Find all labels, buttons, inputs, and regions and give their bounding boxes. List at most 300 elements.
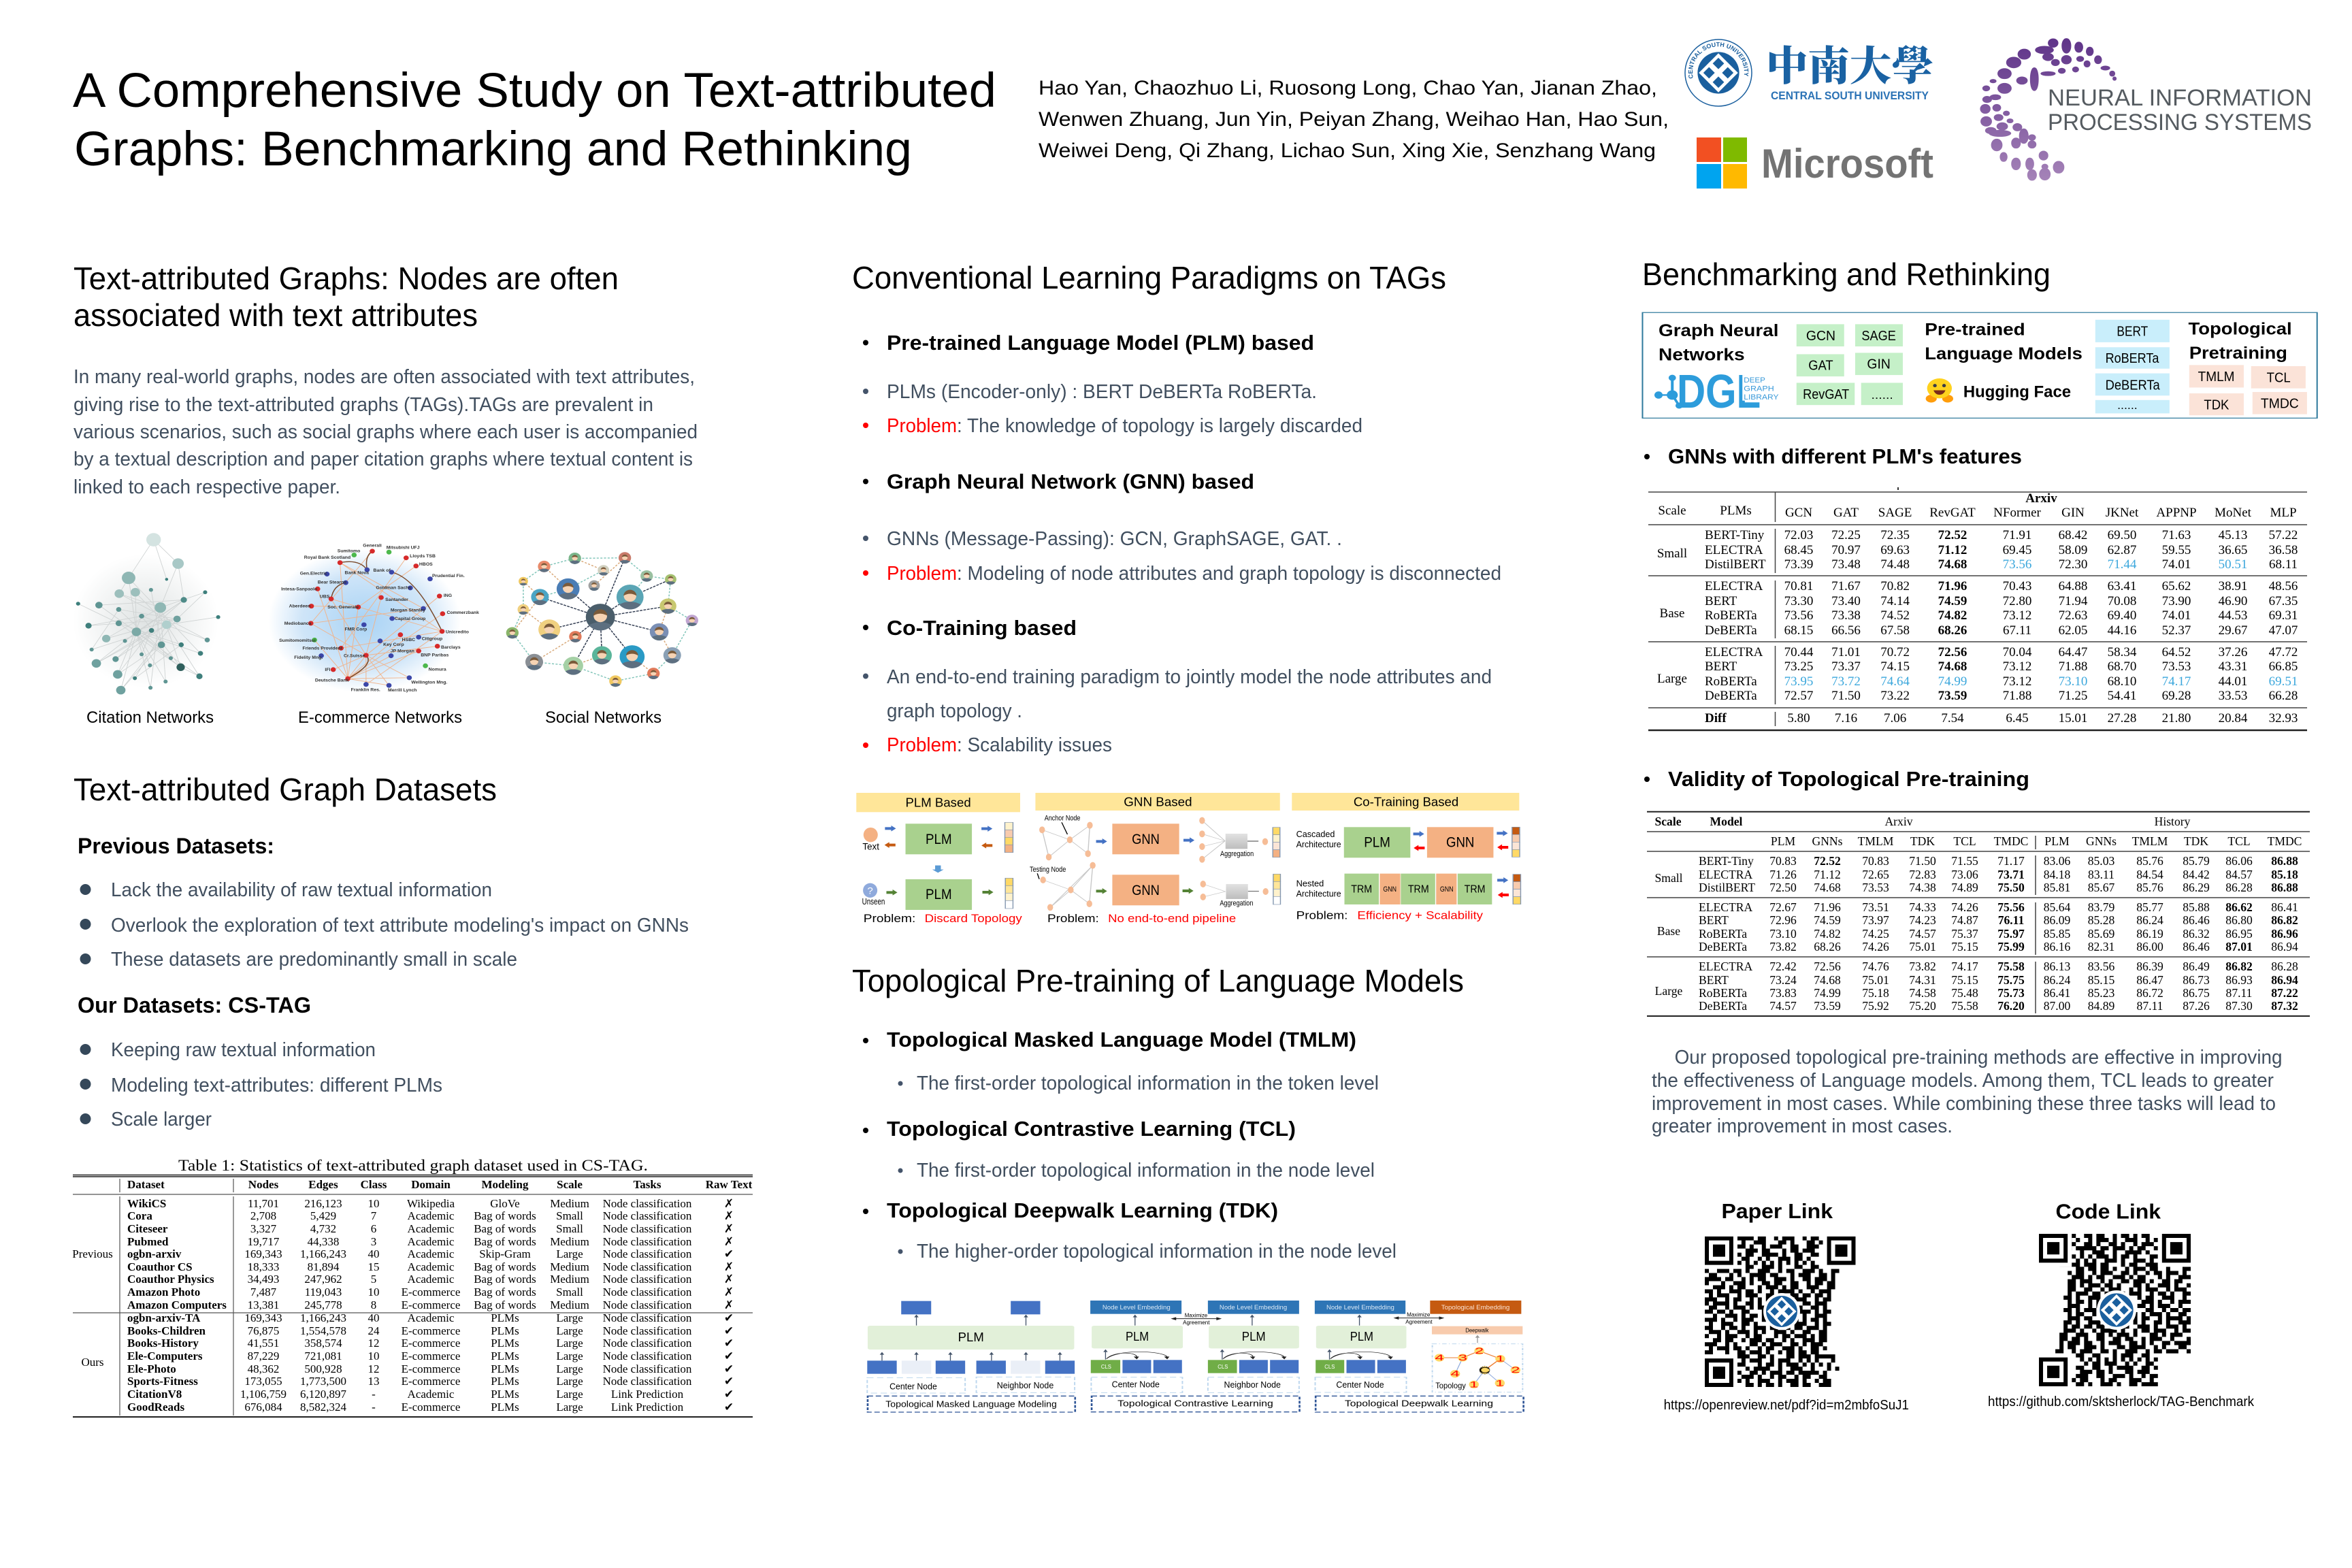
panel: co-training based: Efficiency + Scalability bbox=[1357, 909, 1483, 921]
list item: TCL: The first-order topological information in the node level bbox=[917, 1160, 1375, 1181]
table: dataset statistics: E-commerce bbox=[402, 1362, 460, 1375]
table: GNNs with different PLMs: 73.30 bbox=[1784, 594, 1813, 608]
table: topological pre-training results: 86.46 bbox=[2183, 940, 2210, 953]
table: dataset statistics: Large bbox=[556, 1247, 583, 1260]
table: GNNs with different PLMs: 36.65 bbox=[2219, 543, 2247, 557]
table: dataset statistics bbox=[72, 1157, 753, 1417]
panel: GNN based: Problem: bbox=[1047, 912, 1099, 925]
table: GNNs with different PLMs: 74.01 bbox=[2162, 608, 2191, 623]
table: dataset statistics: Class bbox=[361, 1178, 387, 1191]
panel: topological deepwalk learning: 3 bbox=[1458, 1353, 1467, 1362]
table: GNNs with different PLMs: BERT bbox=[1705, 659, 1737, 674]
table: dataset statistics: Bag of words bbox=[474, 1235, 536, 1248]
table: GNNs with different PLMs: 7.54 bbox=[1941, 711, 1964, 725]
table: GNNs with different PLMs: 32.93 bbox=[2269, 711, 2298, 725]
panel: GNN based: Aggregation bbox=[1220, 849, 1254, 858]
list: GNN based bbox=[863, 470, 1501, 585]
sub-panel: topological pretraining: TMDC bbox=[2261, 395, 2299, 411]
panel: GNN based: Anchor Node bbox=[1045, 814, 1080, 822]
panel: topological deepwalk learning: Deepwalk bbox=[1465, 1327, 1489, 1333]
table: topological pre-training results: 74.87 bbox=[1951, 913, 1978, 927]
table: dataset statistics: Sports-Fitness bbox=[127, 1375, 198, 1388]
table: GNNs with different PLMs: 44.16 bbox=[2108, 623, 2136, 638]
table: dataset statistics: ✔ bbox=[724, 1401, 734, 1414]
table: GNNs with different PLMs: 73.90 bbox=[2162, 594, 2191, 608]
table: topological pre-training results: 76.20 bbox=[1997, 999, 2025, 1013]
table: GNNs with different PLMs: 73.12 bbox=[2003, 674, 2031, 689]
table: dataset statistics: 7,487 bbox=[250, 1286, 277, 1298]
table: topological pre-training results: History bbox=[2155, 815, 2191, 828]
table: dataset statistics: Large bbox=[556, 1401, 583, 1414]
table: dataset statistics: 10 bbox=[368, 1350, 380, 1362]
table: dataset statistics: Large bbox=[556, 1337, 583, 1350]
sub-panel: graph neural networks: Graph Neural bbox=[1659, 321, 1778, 340]
sub-panel: pre-trained language models: Hugging Face bbox=[1963, 382, 2071, 401]
text block: our datasets: Modeling text-attributes: different PLMs bbox=[111, 1075, 442, 1096]
table: dataset statistics: Table 1: Statistics of text-attributed graph dataset used in CS-TAG. bbox=[178, 1157, 648, 1174]
table: GNNs with different PLMs: 71.44 bbox=[2108, 557, 2137, 572]
table: topological pre-training results: 86.94 bbox=[2271, 940, 2298, 953]
heading: benchmarking: Benchmarking and Rethinking bbox=[1642, 257, 2051, 292]
table: GNNs with different PLMs: RoBERTa bbox=[1705, 674, 1757, 689]
table: GNNs with different PLMs: 38.91 bbox=[2219, 579, 2247, 593]
text block: TAG introduction: giving rise to the text-attributed graphs (TAGs).TAGs are prevalent in bbox=[74, 394, 653, 416]
panel: PLM based: Discard Topology bbox=[925, 912, 1022, 925]
table: GNNs with different PLMs: 29.67 bbox=[2219, 623, 2247, 638]
table: topological pre-training results: 74.17 bbox=[1951, 960, 1978, 973]
panel: co-training based: GNN bbox=[1383, 885, 1396, 893]
table: GNNs with different PLMs: 74.17 bbox=[2162, 674, 2191, 689]
panel: co-training based: Problem: bbox=[1296, 909, 1348, 921]
table: dataset statistics: 8,582,324 bbox=[300, 1401, 347, 1414]
table: topological pre-training results: 86.47 bbox=[2136, 973, 2163, 987]
chart: e-commerce network: Bank of bbox=[374, 568, 391, 573]
table: dataset statistics: Large bbox=[556, 1324, 583, 1337]
title: A Comprehensive Study on Text-attributed bbox=[73, 64, 996, 118]
panel: PLM based: ? bbox=[867, 885, 873, 896]
table: topological pre-training results: 86.29 bbox=[2183, 881, 2210, 894]
panel: co-training based: GNN bbox=[1446, 834, 1474, 850]
panel: PLM based bbox=[856, 793, 1022, 925]
table: GNNs with different PLMs: 73.10 bbox=[2059, 674, 2087, 689]
table: topological pre-training results bbox=[1647, 812, 2310, 1016]
table: dataset statistics: 1,554,578 bbox=[300, 1324, 346, 1337]
panel: topological masked language modeling: PLM bbox=[958, 1330, 984, 1344]
table: dataset statistics: ✔ bbox=[724, 1350, 734, 1363]
table: dataset statistics: Bag of words bbox=[474, 1286, 536, 1298]
authors bbox=[1039, 77, 1669, 162]
table: topological pre-training results: 68.26 bbox=[1814, 940, 1841, 953]
table: GNNs with different PLMs: 73.12 bbox=[2003, 659, 2031, 674]
table: GNNs with different PLMs: 73.12 bbox=[2003, 608, 2031, 623]
table: topological pre-training results: 74.82 bbox=[1814, 927, 1841, 941]
table: dataset statistics: Medium bbox=[550, 1273, 589, 1286]
table: topological pre-training results: 75.58 bbox=[1951, 999, 1978, 1013]
table: GNNs with different PLMs: 71.96 bbox=[1938, 579, 1967, 593]
table: dataset statistics: PLMs bbox=[491, 1375, 519, 1388]
subheading: validity of topological pre-training: Validity of Topological Pre-training bbox=[1668, 767, 2029, 791]
table: topological pre-training results: 84.54 bbox=[2136, 868, 2163, 881]
list: PLM based: Problem bbox=[887, 415, 957, 437]
table: topological pre-training results: 85.76 bbox=[2136, 854, 2163, 868]
table: dataset statistics: 169,343 bbox=[244, 1247, 282, 1260]
panel: GNN based bbox=[1030, 793, 1280, 925]
text block: our datasets bbox=[78, 993, 442, 1130]
table: GNNs with different PLMs: 67.11 bbox=[2003, 623, 2031, 638]
table: dataset statistics: 169,343 bbox=[244, 1311, 282, 1324]
table: GNNs with different PLMs: 72.25 bbox=[1831, 528, 1861, 542]
table: dataset statistics: Citeseer bbox=[127, 1222, 168, 1235]
chart: e-commerce network: HSBC bbox=[402, 638, 415, 642]
authors: Wenwen Zhuang, Jun Yin, Peiyan Zhang, Weihao Han, Hao Sun, bbox=[1039, 108, 1669, 131]
table: topological pre-training results: 72.50 bbox=[1769, 881, 1797, 894]
chart: e-commerce network: Bank Nova bbox=[344, 571, 369, 575]
table: topological pre-training results: 73.51 bbox=[1862, 900, 1889, 914]
table: GNNs with different PLMs: 68.70 bbox=[2108, 659, 2136, 674]
table: dataset statistics: Domain bbox=[411, 1178, 451, 1191]
table: GNNs with different PLMs: 68.45 bbox=[1784, 543, 1813, 557]
table: dataset statistics: 358,574 bbox=[304, 1337, 342, 1350]
table: dataset statistics: ✗ bbox=[724, 1235, 734, 1249]
table: topological pre-training results: 72.42 bbox=[1769, 960, 1797, 973]
table: topological pre-training results: 75.97 bbox=[1997, 927, 2025, 941]
chart: e-commerce network: Mitsubishi UFJ bbox=[387, 546, 420, 550]
table: GNNs with different PLMs: 66.85 bbox=[2269, 659, 2298, 674]
table: topological pre-training results: TMLM bbox=[2132, 834, 2168, 848]
table: dataset statistics: Node classification bbox=[603, 1298, 692, 1311]
table: GNNs with different PLMs: 71.63 bbox=[2162, 528, 2191, 542]
table: topological pre-training results: 74.25 bbox=[1862, 927, 1889, 941]
table: dataset statistics: 81,894 bbox=[308, 1260, 340, 1273]
table: topological pre-training results: 76.11 bbox=[1998, 913, 2024, 927]
table: GNNs with different PLMs: 67.58 bbox=[1880, 623, 1910, 638]
table: GNNs with different PLMs bbox=[1648, 487, 2307, 730]
table: dataset statistics: Skip-Gram bbox=[479, 1247, 531, 1260]
table: topological pre-training results: DeBERTa bbox=[1699, 940, 1747, 953]
panel: co-training based: GNN bbox=[1440, 885, 1453, 893]
table: topological pre-training results: 86.39 bbox=[2136, 960, 2163, 973]
list item: TCL bbox=[863, 1117, 1375, 1181]
list item: TMLM bbox=[863, 1028, 1379, 1094]
table: topological pre-training results: 73.82 bbox=[1769, 940, 1797, 953]
list item: TMLM: Topological Masked Language Model (TMLM) bbox=[887, 1028, 1356, 1051]
sub-panel: graph neural networks: LIBRARY bbox=[1744, 393, 1779, 402]
chart: e-commerce network: Commerzbank bbox=[446, 610, 479, 615]
table: dataset statistics: Large bbox=[556, 1350, 583, 1362]
table: topological pre-training results: 86.82 bbox=[2225, 960, 2253, 973]
logo: NeurIPS: PROCESSING SYSTEMS bbox=[2048, 110, 2312, 135]
table: GNNs with different PLMs: 73.22 bbox=[1880, 689, 1910, 703]
table: dataset statistics: - bbox=[372, 1388, 376, 1401]
table: dataset statistics: ✗ bbox=[724, 1286, 734, 1299]
table: dataset statistics: Academic bbox=[408, 1260, 455, 1273]
table: GNNs with different PLMs: 70.44 bbox=[1784, 645, 1814, 659]
text block: previous datasets: Previous Datasets: bbox=[78, 834, 274, 858]
panel: topological contrastive learning: Center Node bbox=[1112, 1379, 1160, 1390]
chart: e-commerce network: Bear Stearns bbox=[318, 581, 346, 585]
panel: PLM based: Unseen bbox=[862, 896, 885, 906]
table: dataset statistics: 13 bbox=[368, 1375, 380, 1388]
table: dataset statistics: Medium bbox=[550, 1235, 589, 1248]
panel: PLM based: PLM Based bbox=[906, 796, 971, 810]
table: topological pre-training results: 74.31 bbox=[1909, 973, 1936, 987]
table: dataset statistics: CitationV8 bbox=[127, 1388, 182, 1401]
table: dataset statistics: Bag of words bbox=[474, 1260, 536, 1273]
table: GNNs with different PLMs: ELECTRA bbox=[1705, 645, 1763, 659]
table: dataset statistics: Large bbox=[556, 1375, 583, 1388]
table: GNNs with different PLMs: 7.16 bbox=[1835, 711, 1857, 725]
text block: conclusion: greater improvement in most cases. bbox=[1652, 1115, 1953, 1137]
table: GNNs with different PLMs: 68.10 bbox=[2108, 674, 2136, 689]
chart: e-commerce network: Gen.Electric bbox=[300, 571, 327, 576]
captions: network types bbox=[86, 708, 662, 727]
text block: previous datasets: Lack the availability of raw textual information bbox=[111, 879, 492, 901]
panel: co-training based: Co-Training Based bbox=[1354, 796, 1458, 809]
table: dataset statistics: Amazon Photo bbox=[127, 1286, 200, 1298]
sub-panel: graph neural networks: RevGAT bbox=[1803, 386, 1849, 402]
table: dataset statistics: 1,166,243 bbox=[300, 1247, 346, 1260]
table: topological pre-training results: 86.28 bbox=[2225, 881, 2253, 894]
sub-panel: topological pretraining: Topological bbox=[2188, 319, 2292, 338]
list: co-training based: graph topology . bbox=[887, 700, 1022, 722]
captions: network types: Citation Networks bbox=[86, 708, 214, 727]
table: dataset statistics: Academic bbox=[408, 1273, 455, 1286]
logo: Microsoft bbox=[1697, 137, 1933, 189]
table: topological pre-training results: 86.24 bbox=[2044, 973, 2070, 987]
table: dataset statistics: 40 bbox=[368, 1247, 380, 1260]
panel: topological contrastive learning: Node Level Embedding bbox=[1102, 1304, 1171, 1311]
table: dataset statistics: ✔ bbox=[724, 1362, 734, 1376]
logo: NeurIPS: NEURAL INFORMATION bbox=[2048, 85, 2312, 111]
table: topological pre-training results: 86.80 bbox=[2225, 913, 2253, 927]
sub-panel: pre-trained language models: BERT bbox=[2117, 323, 2148, 339]
table: topological pre-training results: 86.72 bbox=[2136, 986, 2163, 1000]
table: topological pre-training results: 72.52 bbox=[1814, 854, 1841, 868]
panel: PLM based: Text bbox=[862, 841, 879, 851]
table: dataset statistics: Pubmed bbox=[127, 1235, 169, 1248]
table: topological pre-training results: 86.96 bbox=[2271, 927, 2298, 941]
sub-panel: pre-trained language models: ...... bbox=[2117, 399, 2138, 412]
diagram: learning paradigms bbox=[856, 793, 1520, 925]
table: GNNs with different PLMs: 71.94 bbox=[2059, 594, 2088, 608]
table: topological pre-training results: 83.56 bbox=[2088, 960, 2114, 973]
code link QR: https://github.com/sktsherlock/TAG-Benchmark bbox=[1988, 1394, 2255, 1409]
table: topological pre-training results: 74.33 bbox=[1909, 900, 1936, 914]
chart: e-commerce network: Aberdeen bbox=[289, 604, 310, 609]
table: GNNs with different PLMs: 69.31 bbox=[2269, 608, 2298, 623]
table: topological pre-training results: 85.81 bbox=[2044, 881, 2070, 894]
table: GNNs with different PLMs: 71.91 bbox=[2003, 528, 2031, 542]
table: GNNs with different PLMs: 71.50 bbox=[1831, 689, 1861, 703]
table: GNNs with different PLMs: 47.07 bbox=[2269, 623, 2298, 638]
table: topological pre-training results: 71.12 bbox=[1814, 868, 1841, 881]
table: topological pre-training results: 84.42 bbox=[2183, 868, 2210, 881]
sub-panel: pre-trained language models: DeBERTa bbox=[2106, 377, 2160, 393]
table: topological pre-training results: 85.15 bbox=[2088, 973, 2114, 987]
panel: co-training based: TRM bbox=[1465, 883, 1486, 895]
table: topological pre-training results: 85.85 bbox=[2044, 927, 2070, 941]
chart: e-commerce network: Santander bbox=[385, 598, 408, 602]
table: topological pre-training results: 70.83 bbox=[1769, 854, 1797, 868]
table: dataset statistics: 676,084 bbox=[244, 1401, 282, 1414]
table: GNNs with different PLMs: RevGAT bbox=[1929, 506, 1976, 520]
paper link QR: https://openreview.net/pdf?id=m2mbfoSuJ1 bbox=[1664, 1398, 1909, 1413]
table: GNNs with different PLMs: 45.13 bbox=[2219, 528, 2247, 542]
table: dataset statistics: 76,875 bbox=[248, 1324, 279, 1337]
table: topological pre-training results: 74.76 bbox=[1862, 960, 1889, 973]
panel: topological masked language modeling bbox=[867, 1301, 1075, 1412]
panel: topological masked language modeling: Center Node bbox=[889, 1382, 937, 1392]
table: dataset statistics: PLMs bbox=[491, 1362, 519, 1375]
text block: previous datasets: These datasets are predominantly small in scale bbox=[111, 949, 517, 970]
table: GNNs with different PLMs: 69.40 bbox=[2108, 608, 2136, 623]
table: GNNs with different PLMs: 44.01 bbox=[2219, 674, 2247, 689]
table: topological pre-training results: 87.22 bbox=[2271, 986, 2298, 1000]
table: GNNs with different PLMs: 72.35 bbox=[1880, 528, 1910, 542]
table: topological pre-training results: 74.26 bbox=[1862, 940, 1889, 953]
chart: e-commerce network: Wellington Mng. bbox=[411, 680, 448, 685]
table: topological pre-training results: BERT bbox=[1699, 913, 1729, 927]
sub-panel: pre-trained language models bbox=[1925, 320, 2170, 413]
table: topological pre-training results: 86.00 bbox=[2136, 940, 2163, 953]
text block: TAG introduction: various scenarios, such as social graphs where each user is accompanied bbox=[74, 421, 698, 443]
logo: Microsoft: Microsoft bbox=[1761, 141, 1933, 186]
panel: topological contrastive learning: PLM bbox=[1242, 1330, 1266, 1343]
table: topological pre-training results: 85.18 bbox=[2271, 868, 2298, 881]
table: GNNs with different PLMs: SAGE bbox=[1878, 506, 1912, 520]
table: dataset statistics: Wikipedia bbox=[407, 1197, 455, 1210]
list: topological methods bbox=[863, 1028, 1396, 1262]
table: topological pre-training results: 86.41 bbox=[2044, 986, 2070, 1000]
panel: co-training based: Nested bbox=[1296, 878, 1324, 888]
text block: TAG introduction: by a textual description and paper citation graphs where textual content is bbox=[74, 448, 693, 470]
table: topological pre-training results: TMLM bbox=[1858, 834, 1894, 848]
table: dataset statistics: 500,928 bbox=[304, 1362, 342, 1375]
table: GNNs with different PLMs: 33.53 bbox=[2219, 689, 2247, 703]
chart: social network bbox=[506, 552, 698, 687]
table: topological pre-training results: 86.94 bbox=[2271, 973, 2298, 987]
authors: Hao Yan, Chaozhuo Li, Ruosong Long, Chao Yan, Jianan Zhao, bbox=[1039, 77, 1657, 99]
table: dataset statistics: 5,429 bbox=[310, 1209, 336, 1222]
chart: e-commerce network: Sumitomomitsui bbox=[279, 638, 316, 643]
table: topological pre-training results: 75.15 bbox=[1951, 940, 1978, 953]
table: GNNs with different PLMs: 63.41 bbox=[2108, 579, 2136, 593]
table: dataset statistics: Bag of words bbox=[474, 1209, 536, 1222]
table: GNNs with different PLMs: 73.38 bbox=[1831, 608, 1861, 623]
table: dataset statistics: 247,962 bbox=[304, 1273, 342, 1286]
table: GNNs with different PLMs: 74.68 bbox=[1938, 557, 1967, 572]
panel: topological masked language modeling: Neighbor Node bbox=[997, 1381, 1054, 1390]
table: GNNs with different PLMs: 71.12 bbox=[1938, 543, 1967, 557]
table: GNNs with different PLMs: 73.39 bbox=[1784, 557, 1813, 572]
table: GNNs with different PLMs: MLP bbox=[2270, 506, 2297, 520]
table: GNNs with different PLMs: Arxiv bbox=[2025, 491, 2057, 506]
table: GNNs with different PLMs: Large bbox=[1657, 672, 1687, 686]
table: GNNs with different PLMs: 70.81 bbox=[1784, 579, 1813, 593]
list: co-training based bbox=[863, 616, 1492, 756]
table: GNNs with different PLMs: Diff bbox=[1705, 711, 1727, 725]
table: dataset statistics: 119,043 bbox=[305, 1286, 342, 1298]
table: topological pre-training results: 87.26 bbox=[2183, 999, 2210, 1013]
chart: e-commerce network: HBOS bbox=[419, 562, 433, 567]
table: dataset statistics: Academic bbox=[408, 1388, 455, 1401]
table: GNNs with different PLMs: 70.97 bbox=[1831, 543, 1861, 557]
table: dataset statistics: Medium bbox=[550, 1298, 589, 1311]
table: GNNs with different PLMs: GCN bbox=[1785, 506, 1812, 520]
table: dataset statistics: Medium bbox=[550, 1260, 589, 1273]
table: dataset statistics: 10 bbox=[368, 1286, 380, 1298]
table: dataset statistics: ✗ bbox=[724, 1197, 734, 1211]
table: topological pre-training results: 86.24 bbox=[2136, 913, 2163, 927]
table: dataset statistics: 5 bbox=[371, 1273, 376, 1286]
subheading: GNNs with different features: GNNs with different PLM's features bbox=[1668, 444, 2022, 468]
heading: datasets: Text-attributed Graph Datasets bbox=[74, 772, 497, 807]
table: topological pre-training results: 86.09 bbox=[2044, 913, 2070, 927]
table: topological pre-training results: 73.71 bbox=[1997, 868, 2025, 881]
panel: topological deepwalk learning: 1 bbox=[1469, 1379, 1478, 1389]
table: dataset statistics: Node classification bbox=[603, 1235, 692, 1248]
table: topological pre-training results: 75.37 bbox=[1951, 927, 1978, 941]
panel: GNN based: GNN bbox=[1132, 882, 1160, 898]
table: topological pre-training results: 85.64 bbox=[2044, 900, 2070, 914]
sub-panel: graph neural networks: Networks bbox=[1659, 345, 1745, 364]
list: GNN based: GNNs (Message-Passing): GCN, GraphSAGE, GAT. . bbox=[887, 528, 1342, 550]
list: PLM based: PLMs (Encoder-only) : BERT DeBERTa RoBERTa. bbox=[887, 381, 1317, 403]
table: GNNs with different PLMs: 71.88 bbox=[2003, 689, 2031, 703]
table: topological pre-training results: 87.32 bbox=[2271, 999, 2298, 1013]
table: GNNs with different PLMs: RoBERTa bbox=[1705, 608, 1757, 623]
table: topological pre-training results: 86.62 bbox=[2225, 900, 2253, 914]
table: GNNs with different PLMs: 44.53 bbox=[2219, 608, 2247, 623]
table: dataset statistics: Node classification bbox=[603, 1260, 692, 1273]
table: topological pre-training results: Large bbox=[1655, 984, 1683, 998]
sub-panel: topological pretraining: TDK bbox=[2204, 397, 2229, 412]
table: topological pre-training results: 83.06 bbox=[2044, 854, 2070, 868]
panel: co-training based: TRM bbox=[1351, 883, 1372, 895]
table: GNNs with different PLMs: 71.25 bbox=[2059, 689, 2087, 703]
table: topological pre-training results: 87.11 bbox=[2137, 999, 2163, 1013]
table: dataset statistics: Ours bbox=[81, 1356, 104, 1369]
chart: e-commerce network: Prudential Fin. bbox=[432, 574, 465, 578]
table: dataset statistics: Academic bbox=[408, 1209, 455, 1222]
table: topological pre-training results: ELECTRA bbox=[1699, 900, 1752, 914]
table: GNNs with different PLMs: 36.58 bbox=[2269, 543, 2298, 557]
panel: PLM based: Problem: bbox=[864, 912, 915, 925]
table: dataset statistics: PLMs bbox=[491, 1388, 519, 1401]
table: dataset statistics: Small bbox=[556, 1222, 583, 1235]
chart: citation network bbox=[73, 533, 220, 694]
text block: TAG introduction: In many real-world graphs, nodes are often associated with text attributes, bbox=[74, 366, 695, 388]
heading: text-attributed graphs bbox=[74, 261, 619, 333]
table: dataset statistics: Bag of words bbox=[474, 1222, 536, 1235]
panel: topological deepwalk learning: Topology bbox=[1435, 1381, 1466, 1390]
table: GNNs with different PLMs: 59.55 bbox=[2162, 543, 2191, 557]
table: GNNs with different PLMs: 74.52 bbox=[1880, 608, 1910, 623]
table: topological pre-training results: 74.23 bbox=[1909, 913, 1936, 927]
table: dataset statistics: 2,708 bbox=[250, 1209, 276, 1222]
table: dataset statistics: Nodes bbox=[248, 1178, 279, 1191]
table: GNNs with different PLMs: 66.56 bbox=[1831, 623, 1861, 638]
panel: co-training based: Architecture bbox=[1296, 839, 1341, 849]
table: dataset statistics: 216,123 bbox=[304, 1197, 342, 1210]
table: GNNs with different PLMs: 62.05 bbox=[2059, 623, 2087, 638]
logo: NeurIPS bbox=[1981, 39, 2312, 180]
table: GNNs with different PLMs: 48.56 bbox=[2269, 579, 2298, 593]
list item: TCL: Topological Contrastive Learning (TCL) bbox=[887, 1117, 1296, 1141]
table: topological pre-training results: 74.59 bbox=[1814, 913, 1841, 927]
text block: TAG introduction bbox=[74, 366, 698, 498]
table: GNNs with different PLMs: 68.15 bbox=[1784, 623, 1813, 638]
